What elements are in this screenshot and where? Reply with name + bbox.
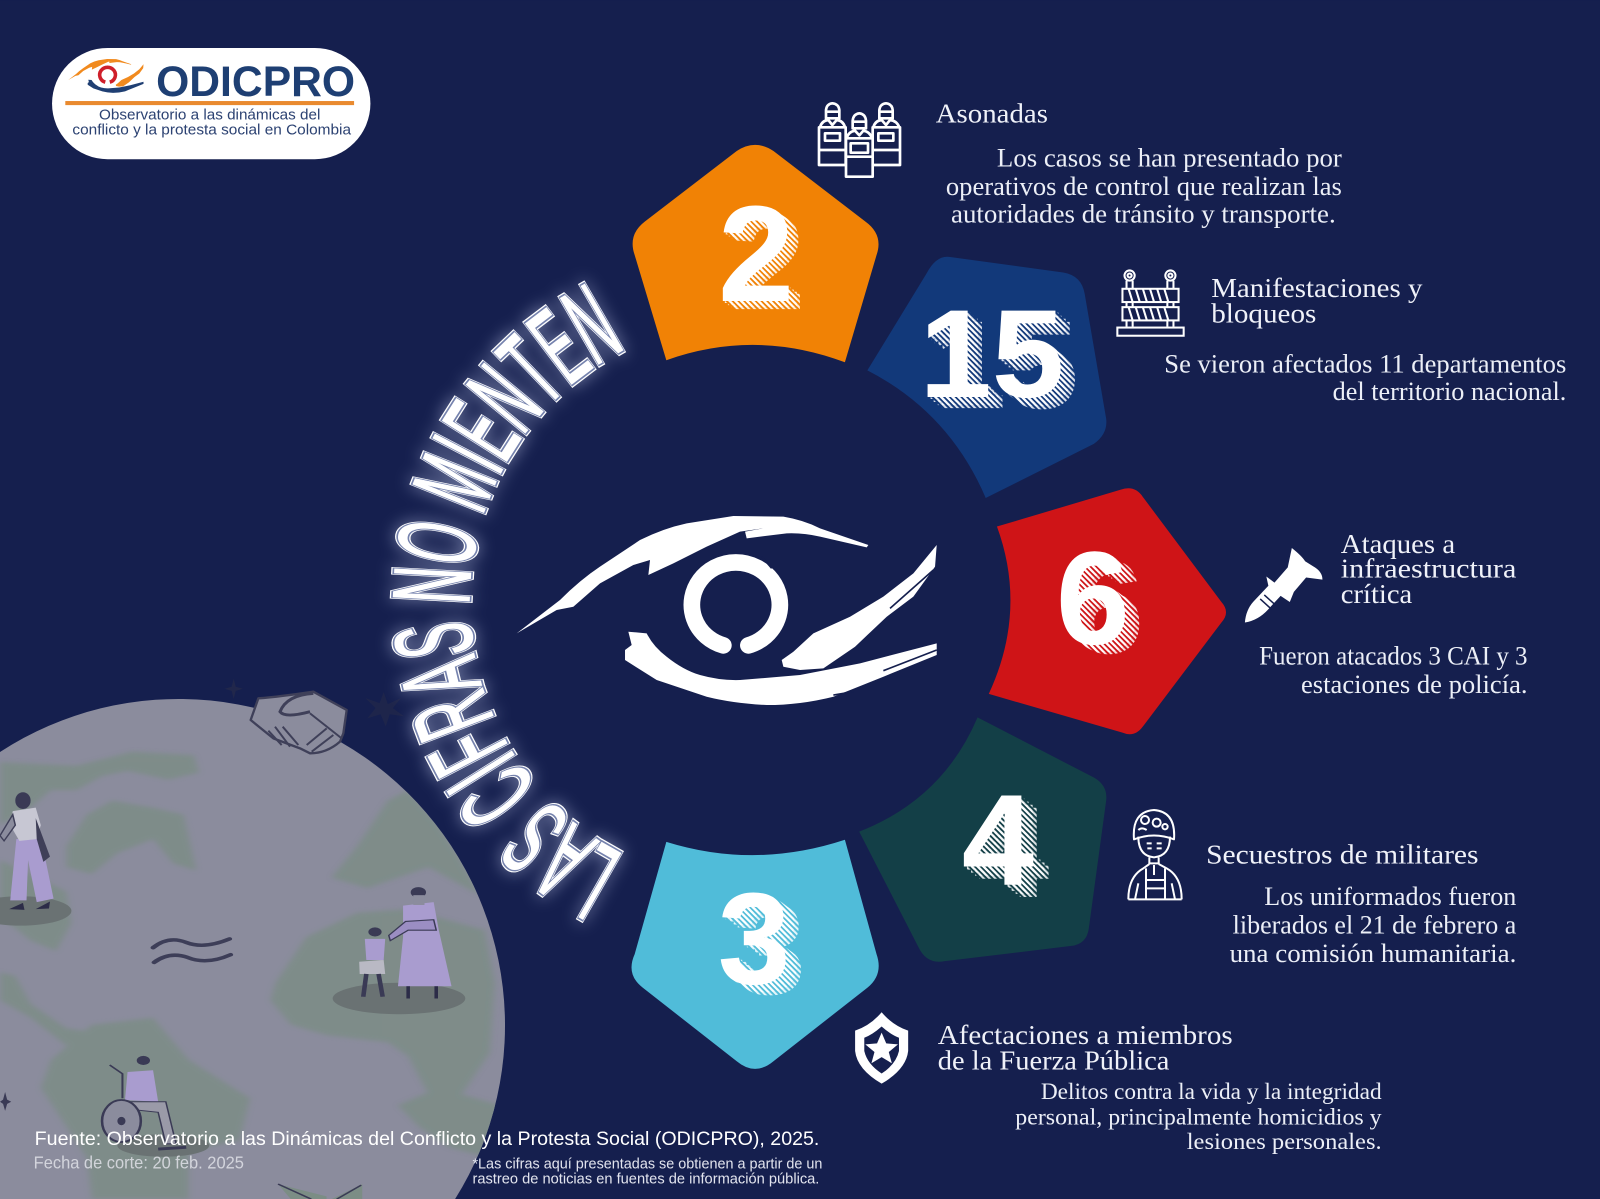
footnote: rastreo de noticias en fuentes de información pública.	[472, 1172, 819, 1188]
cutoff date: Fecha de corte: 20 feb. 2025	[34, 1152, 244, 1172]
pentagon: 15 Manifestaciones	[867, 257, 1106, 498]
text: Secuestros description: liberados el 21 de febrero a	[1233, 910, 1517, 940]
label: Asonadas: Asonadas	[936, 97, 1048, 128]
globe illustration	[0, 679, 505, 1199]
number: 15: 15	[919, 283, 1064, 424]
label: Afectaciones a miembros de la Fuerza Pública: Afectaciones a miembros	[938, 1019, 1233, 1050]
text: Secuestros description: Los uniformados fueron	[1264, 881, 1516, 911]
arc title: Las cifras no mienten: LAS CIFRAS NO MIENTEN	[382, 276, 632, 928]
label: Ataques a infraestructura crítica: crítica	[1341, 578, 1412, 609]
label: Afectaciones a miembros de la Fuerza Pública	[938, 1019, 1233, 1075]
label: Manifestaciones y bloqueos: bloqueos	[1211, 297, 1316, 328]
pentagon: 6 Ataques: 6	[1070, 534, 1144, 682]
text: Manifestaciones description: Se vieron afectados 11 departamentos	[1164, 348, 1566, 378]
pentagon: 2 Asonadas	[633, 145, 879, 362]
label: Secuestros de militares: Secuestros de militares	[1206, 838, 1479, 869]
pentagon: 4 Secuestros: 4	[965, 772, 1037, 916]
pentagon: 15 Manifestaciones: 15	[926, 288, 1070, 429]
label: Manifestaciones y bloqueos	[1211, 272, 1423, 328]
icon: police shield	[855, 1012, 908, 1084]
pentagon: 2 Asonadas: 2	[726, 183, 802, 336]
logo tagline: conflicto y la protesta social en Colombia	[72, 123, 352, 139]
number: 4: 4	[962, 769, 1034, 913]
icon: sparkle	[0, 1092, 11, 1111]
logo tagline: Observatorio a las dinámicas del	[99, 107, 320, 123]
text: Afectaciones description	[1015, 1079, 1382, 1155]
person: woman left	[0, 792, 71, 926]
text: Manifestaciones description: del territorio nacional.	[1333, 376, 1566, 406]
logo eye mark	[68, 59, 144, 93]
label: Ataques a infraestructura crítica	[1341, 528, 1516, 609]
pentagon: 15 Manifestaciones: 15	[930, 291, 1074, 432]
text: Ataques description: estaciones de policía.	[1301, 669, 1528, 699]
pentagon: 3 Afectaciones: 3	[729, 873, 802, 1019]
text: Ataques description	[1259, 640, 1528, 699]
text: Afectaciones description: Delitos contra la vida y la integridad	[1041, 1079, 1382, 1105]
label: Ataques a infraestructura crítica: infraestructura	[1341, 553, 1516, 584]
text: Asonadas description	[946, 142, 1342, 228]
number: 3: 3	[718, 866, 790, 1012]
icon: barricade	[1117, 270, 1184, 336]
continents and figures	[0, 752, 500, 1199]
pentagon: 4 Secuestros: 4	[969, 775, 1041, 919]
icon: missile	[1245, 548, 1322, 622]
pentagon: 3 Afectaciones	[632, 840, 879, 1069]
footnote: *Las cifras aquí presentadas se obtienen a partir de un	[472, 1156, 822, 1172]
text: Manifestaciones description	[1164, 348, 1566, 406]
icon: handshake	[251, 692, 347, 753]
pentagon: 4 Secuestros	[859, 717, 1106, 962]
pentagon: 6 Ataques: 6	[1059, 527, 1133, 675]
pentagon: 2 Asonadas: 2	[720, 179, 796, 332]
pentagon: 6 Ataques: 6	[1066, 532, 1140, 680]
arc title: Las cifras no mienten: LAS CIFRAS NO MIENTEN	[391, 282, 625, 922]
pentagon: 15 Manifestaciones: 15	[934, 294, 1079, 435]
pentagon: 15 Manifestaciones: 15	[922, 285, 1067, 426]
text: Ataques description: Fueron atacados 3 CAI y 3	[1259, 640, 1528, 670]
arc title: Las cifras no mienten: LAS CIFRAS NO MIENTEN	[390, 280, 626, 924]
central eye logo	[517, 516, 937, 705]
icon: soldier	[1128, 810, 1182, 899]
text: Secuestros description: una comisión humanitaria.	[1230, 938, 1516, 968]
pentagon: 2 Asonadas: 2	[729, 185, 805, 338]
text: Afectaciones description: lesiones personales.	[1187, 1129, 1382, 1155]
pentagon: 4 Secuestros: 4	[973, 778, 1045, 922]
pentagon: 6 Ataques: 6	[1062, 529, 1136, 677]
label: Manifestaciones y bloqueos: Manifestaciones y	[1211, 272, 1423, 303]
pentagon: 4 Secuestros: 4	[977, 781, 1049, 925]
icon: waves	[153, 939, 231, 962]
text: Asonadas description: autoridades de tránsito y transporte.	[951, 198, 1336, 228]
logo wordmark: ODICPRO	[156, 58, 355, 106]
source line: Fuente: Observatorio a las Dinámicas del Conflicto y la Protesta Social (ODICPRO), 2025.	[35, 1128, 819, 1150]
pentagon: 3 Afectaciones: 3	[733, 876, 806, 1022]
number: 6: 6	[1056, 525, 1130, 673]
icon: dim star	[365, 692, 404, 727]
pentagon: 3 Afectaciones: 3	[721, 868, 793, 1014]
person: wheelchair user	[102, 1056, 209, 1157]
icon: leaves	[278, 1184, 362, 1199]
pentagon: 2 Asonadas: 2	[723, 181, 799, 334]
text: Asonadas description: Los casos se han presentado por	[997, 142, 1342, 172]
text: Asonadas description: operativos de control que realizan las	[946, 171, 1342, 201]
person: mother and child	[333, 887, 465, 1014]
logo: ODICPRO	[52, 48, 370, 159]
text: Afectaciones description: personal, principalmente homicidios y	[1015, 1105, 1382, 1131]
number: 2: 2	[718, 177, 794, 330]
arc title: Las cifras no mienten: LAS CIFRAS NO MIENTEN	[392, 284, 624, 920]
label: Ataques a infraestructura crítica: Ataques a	[1341, 528, 1455, 559]
pentagon: 6 Ataques	[989, 488, 1226, 734]
footnote	[472, 1156, 822, 1188]
label: Afectaciones a miembros de la Fuerza Pública: de la Fuerza Pública	[938, 1044, 1169, 1075]
pentagon: 3 Afectaciones: 3	[725, 870, 798, 1016]
icon: protesters	[819, 103, 900, 177]
logo tagline	[72, 107, 352, 139]
icon: dim sparkle	[224, 679, 243, 699]
text: Secuestros description	[1230, 881, 1517, 968]
